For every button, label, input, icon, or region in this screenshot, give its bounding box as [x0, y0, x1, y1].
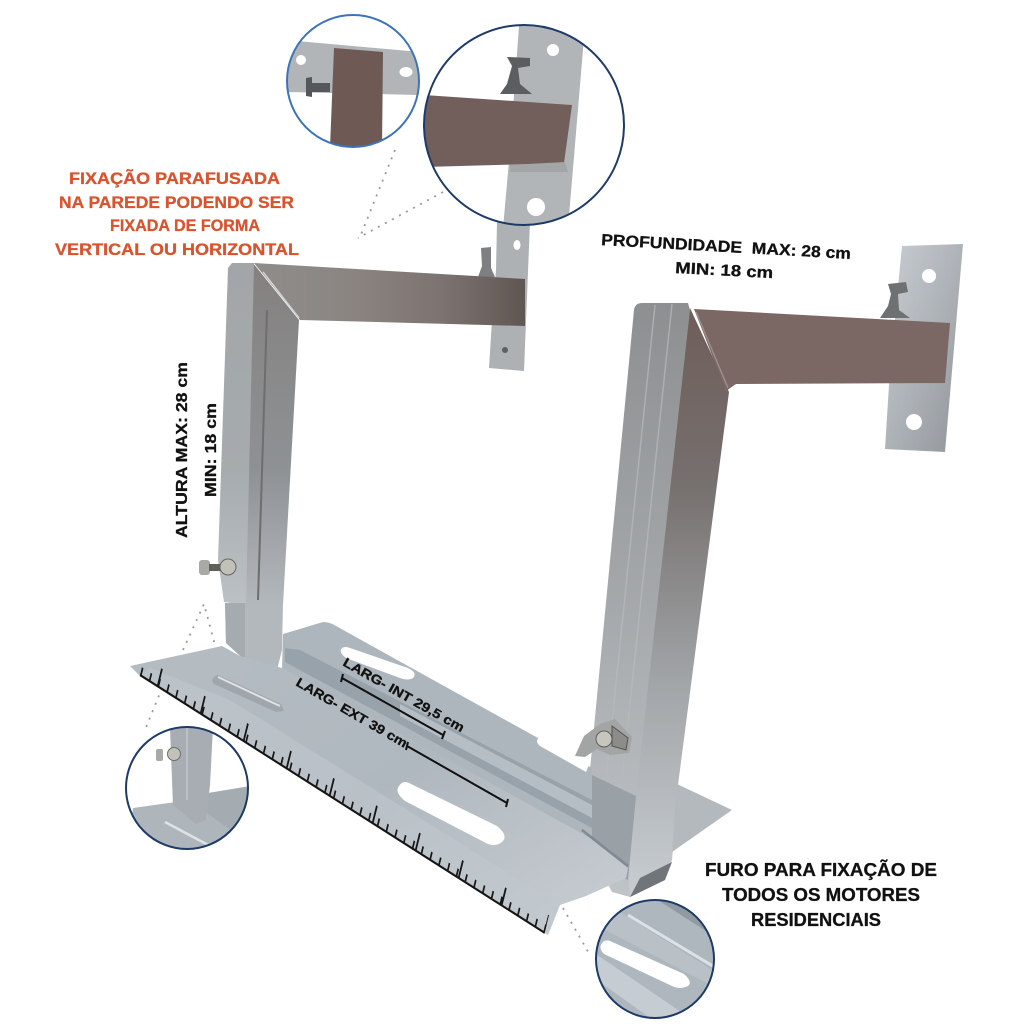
bolt: right bracket [575, 719, 632, 757]
height label: MIN: 18 cm [203, 403, 220, 497]
callout circle: top small [286, 14, 420, 148]
note: mounting holes [705, 859, 937, 930]
wall plate: left bracket [478, 222, 530, 371]
right bracket [589, 244, 963, 897]
lower column shadow [592, 775, 636, 880]
heading: screw fixing note [55, 168, 299, 259]
ruler along front edge [140, 666, 547, 933]
depth label [601, 232, 851, 282]
heading: screw fixing note: VERTICAL OU HORIZONTAL [55, 240, 299, 259]
heading: screw fixing note: NA PAREDE PODENDO SER [59, 193, 294, 212]
extension tube: left bracket [225, 603, 283, 674]
callout circle: lower left [125, 726, 249, 850]
callout circle: top large [420, 20, 630, 230]
rear slot 1 [341, 647, 415, 680]
bolt: left bracket [199, 559, 236, 575]
weld line: right bracket [696, 312, 728, 388]
dotted leader lines: top callouts [358, 150, 443, 238]
arm: right bracket [694, 309, 950, 391]
base plate [130, 622, 632, 935]
note: mounting holes: RESIDENCIAIS [751, 910, 881, 930]
wall plate: right bracket [880, 244, 963, 452]
height label: ALTURA MAX: 28 cm [174, 362, 191, 538]
arm: left bracket [254, 263, 525, 326]
rear flange: right bracket [672, 784, 732, 852]
note: mounting holes: TODOS OS MOTORES [722, 885, 920, 905]
front plate [130, 646, 628, 935]
plate rail [582, 830, 628, 866]
dotted leader lines: bottom callouts [145, 604, 590, 955]
column right face: right bracket [625, 308, 729, 897]
front slot small [212, 675, 284, 712]
height label [174, 362, 220, 538]
heading: screw fixing note: FIXAÇÃO PARAFUSADA [69, 168, 280, 188]
depth label: MIN: 18 cm [675, 260, 774, 282]
callout circle: slot detail [595, 899, 715, 1019]
column ridges: right bracket [606, 304, 672, 790]
rear plate [282, 622, 592, 855]
dimension label: outer width: LARG- EXT 39 cm [294, 675, 410, 751]
front slot small highlight [218, 677, 280, 706]
column left face: right bracket [589, 303, 690, 897]
left bracket [199, 222, 530, 674]
front slot large [397, 782, 505, 845]
column right face: left bracket [245, 263, 299, 605]
channel [285, 648, 592, 828]
front highlight band [140, 668, 560, 935]
rear slot 2 [537, 736, 590, 772]
dimension label: outer width [294, 675, 508, 807]
depth label: PROFUNDIDADE MAX: 28 cm [601, 232, 851, 263]
column left face: left bracket [218, 263, 254, 605]
dimension label: inner width: LARG- INT 29,5 cm [341, 655, 467, 735]
heading: screw fixing note: FIXADA DE FORMA [110, 216, 260, 235]
note: mounting holes: FURO PARA FIXAÇÃO DE [705, 859, 937, 880]
